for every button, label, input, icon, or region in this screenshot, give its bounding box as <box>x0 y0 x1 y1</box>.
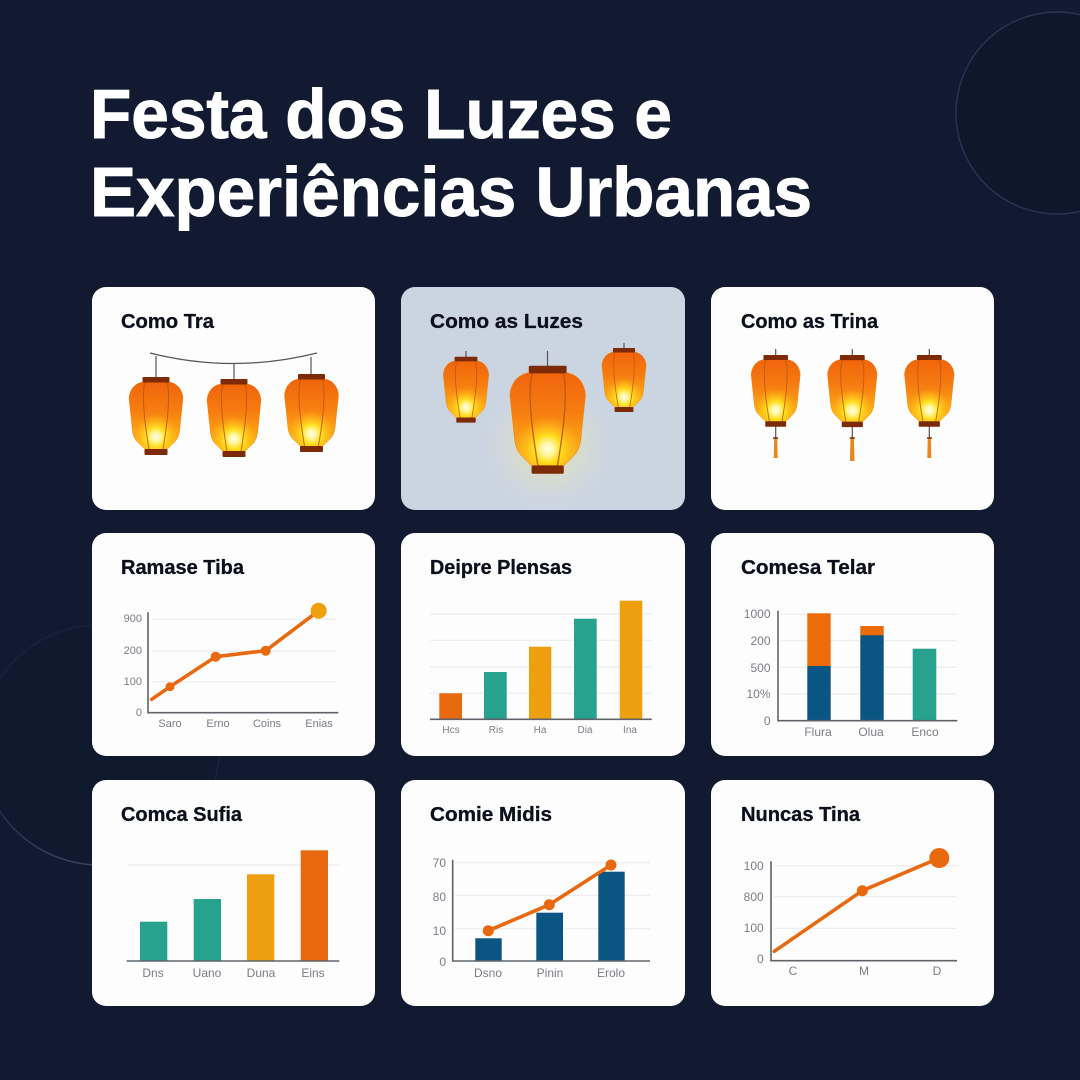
panel: Como Tra <box>92 287 375 510</box>
line chart: 900 <box>124 613 142 625</box>
bar chart: Uano <box>193 966 222 980</box>
panel: Deipre Plensas <box>401 533 685 756</box>
line chart <box>124 603 338 730</box>
panel: Comca Sufia <box>92 780 375 1006</box>
stacked bar chart: 10% <box>746 687 771 701</box>
combo chart <box>433 856 650 980</box>
bar chart: Duna <box>247 966 276 980</box>
bar chart: Dia <box>577 725 593 736</box>
line chart: 0 <box>136 707 142 719</box>
line chart <box>744 848 957 978</box>
decorative circle: top right <box>956 12 1080 214</box>
heading: Como as Trina <box>741 311 879 333</box>
combo chart: 10 <box>433 924 446 938</box>
heading: Como as Luzes <box>430 311 583 333</box>
title <box>90 75 812 231</box>
heading: Comie Midis <box>430 804 552 826</box>
stacked bar chart: Flura <box>804 725 832 739</box>
bar chart: Ha <box>534 725 547 736</box>
panel: Como as Luzes <box>401 287 685 510</box>
line chart: Coins <box>253 718 282 730</box>
line chart: 0 <box>757 952 764 966</box>
bar chart: Eins <box>301 966 325 980</box>
heading: Nuncas Tina <box>741 804 861 826</box>
combo chart: Erolo <box>597 966 625 980</box>
heading: Como Tra <box>121 311 215 333</box>
stacked bar chart: 0 <box>764 714 771 728</box>
combo chart: 0 <box>439 955 446 969</box>
line chart: Erno <box>206 718 230 730</box>
line chart: 100 <box>744 921 764 935</box>
line chart: C <box>789 964 798 978</box>
combo chart: Pinin <box>537 966 563 980</box>
line chart: 100 <box>124 676 142 688</box>
bar chart: Dns <box>142 966 164 980</box>
stacked bar chart: 1000 <box>744 607 771 621</box>
hanging lanterns <box>443 343 646 481</box>
line chart: D <box>933 964 942 978</box>
line chart: Saro <box>158 718 182 730</box>
line chart: M <box>859 964 869 978</box>
line chart: 100 <box>744 859 764 873</box>
stacked bar chart: 200 <box>750 634 771 648</box>
bar chart: Ris <box>489 725 503 736</box>
panel: Ramase Tiba <box>92 533 375 756</box>
stacked bar chart: Enco <box>911 725 939 739</box>
heading: Ramase Tiba <box>121 557 245 579</box>
heading: Comca Sufia <box>121 804 243 826</box>
lanterns with tassels <box>751 349 954 461</box>
string of lanterns <box>129 353 338 462</box>
decorative circle: left <box>0 625 220 865</box>
panel: Comie Midis <box>401 780 685 1006</box>
bar chart <box>430 601 652 736</box>
line chart: Enias <box>305 718 333 730</box>
heading: Comesa Telar <box>741 557 875 579</box>
panel: Como as Trina <box>711 287 994 510</box>
stacked bar chart <box>744 607 957 739</box>
panel: Nuncas Tina <box>711 780 994 1006</box>
line chart: 800 <box>744 890 764 904</box>
bar chart: Ina <box>623 725 637 736</box>
title: Experiências Urbanas <box>90 153 812 231</box>
bar chart: Hcs <box>442 725 460 736</box>
stacked bar chart: 500 <box>750 661 771 675</box>
combo chart: 70 <box>433 856 446 870</box>
title: Festa dos Luzes e <box>90 75 672 153</box>
panel: Comesa Telar <box>711 533 994 756</box>
line chart: 200 <box>124 645 142 657</box>
combo chart: 80 <box>433 890 446 904</box>
heading: Deipre Plensas <box>430 557 572 579</box>
combo chart: Dsno <box>474 966 502 980</box>
stacked bar chart: Olua <box>858 725 884 739</box>
glow halo <box>484 381 612 509</box>
bar chart <box>127 850 339 980</box>
